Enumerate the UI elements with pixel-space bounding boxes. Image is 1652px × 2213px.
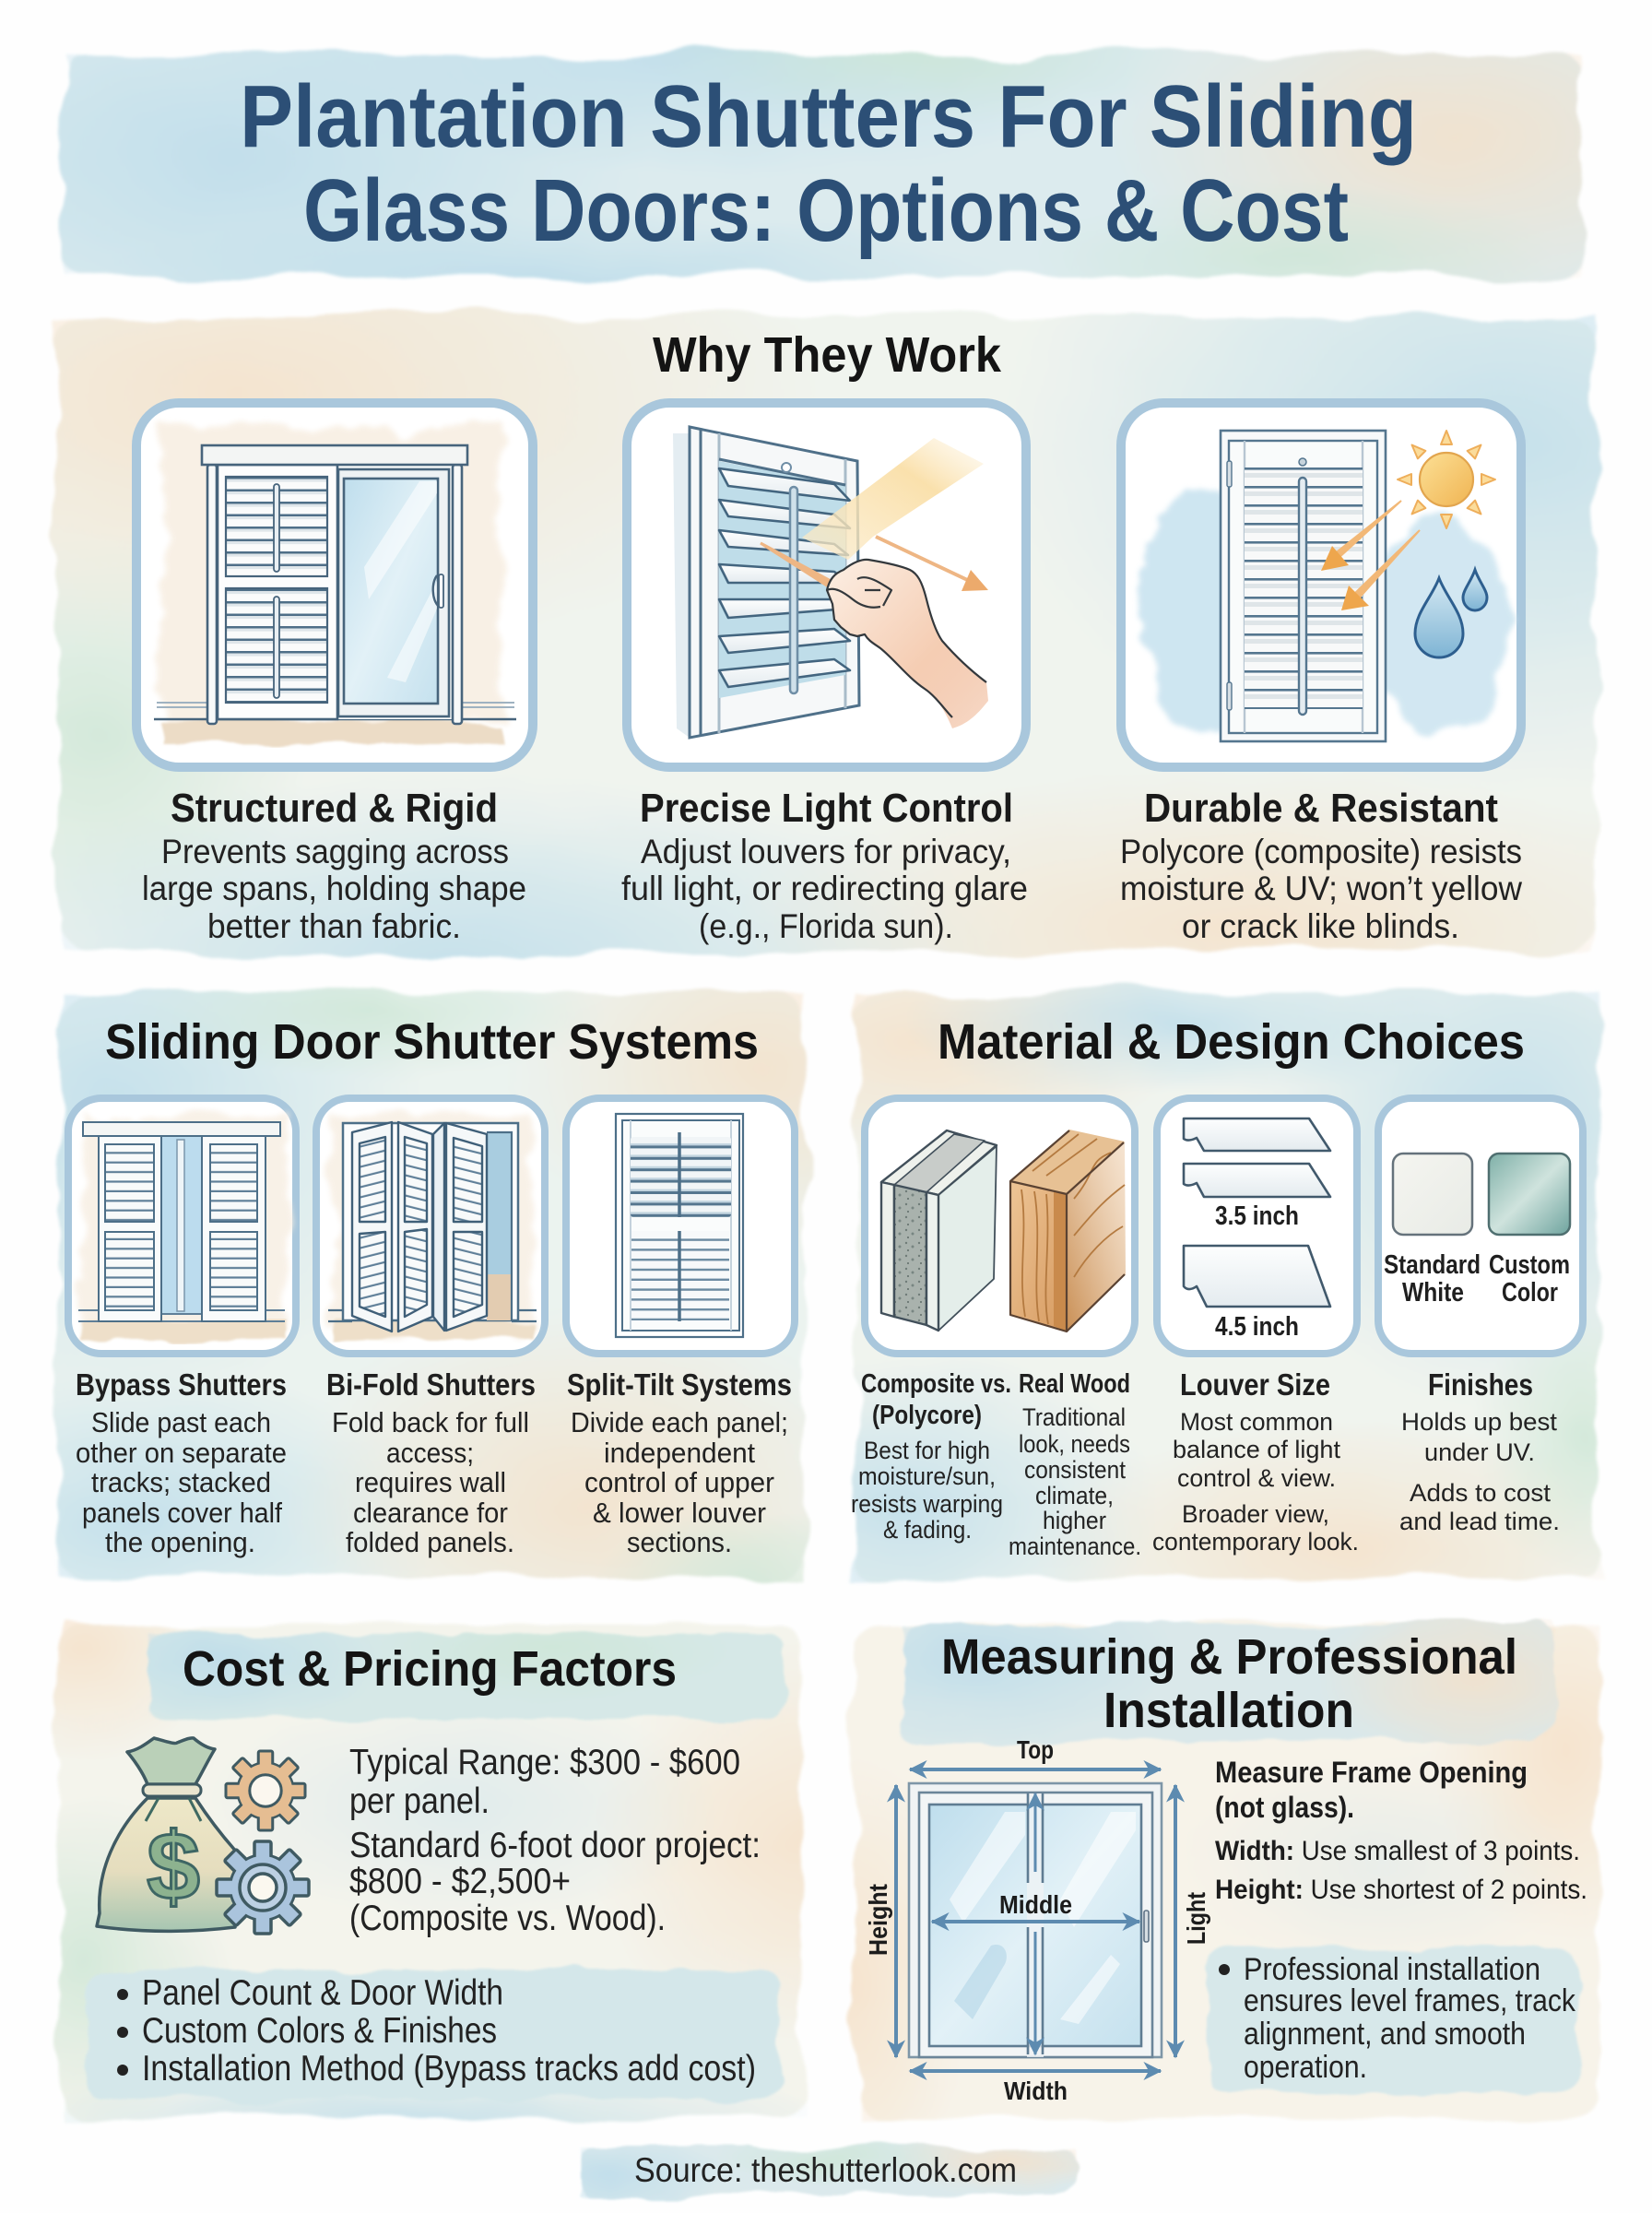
caption: structured and rigid [142,786,526,945]
caption: precise light control: (e.g., Florida sun). [699,907,953,945]
caption: bi-fold shutters: folded panels. [346,1526,514,1558]
caption: bi-fold shutters: Bi-Fold Shutters [326,1367,536,1402]
caption: finishes: and lead time. [1399,1508,1560,1535]
caption: split-tilt systems: control of upper [584,1466,774,1498]
caption: louver size: control & view. [1177,1464,1336,1492]
caption: durable and resistant: Polycore (composite) resists [1120,833,1522,870]
card: split-tilt illustration [566,1098,795,1354]
text: price ranges [349,1743,761,1938]
caption: real wood: consistent [1024,1456,1126,1484]
caption: finishes: Adds to cost [1410,1479,1551,1507]
heading wash: measuring [774,1577,1632,1770]
panel: cost and pricing factors [0,1540,1014,2176]
caption: bypass shutters: Slide past each [91,1406,271,1438]
caption: real wood: Real Wood [1019,1369,1130,1399]
title text [240,67,1417,260]
card: louver size illustration [1157,1098,1357,1354]
title text: Plantation Shutters For Sliding [240,67,1417,166]
caption: durable and resistant: moisture & UV; won’t yellow [1120,870,1522,907]
caption: structured and rigid: better than fabric. [207,907,461,945]
caption: split-tilt systems [567,1367,792,1558]
diagram: window measurement [864,1735,1210,2105]
caption: louver size: balance of light [1173,1436,1340,1463]
caption: real wood: look, needs [1019,1430,1130,1458]
text: measuring instructions: (not glass). [1215,1791,1354,1824]
card: light control illustration [627,403,1026,767]
caption: split-tilt systems: Split-Tilt Systems [567,1367,792,1402]
callout: professional installation: operation. [1244,2050,1367,2085]
diagram: window measurement: Middle [999,1890,1072,1919]
text: measuring instructions [1215,1756,1587,1905]
caption: louver size [1152,1367,1359,1556]
source badge [489,2121,1125,2213]
heading: measuring and professional installation: Measuring & Professional [941,1629,1517,1685]
callout: cost factors list [87,1970,780,2099]
caption: structured and rigid: large spans, holding shape [142,870,526,907]
caption: precise light control: Adjust louvers for privacy, [641,833,1011,870]
caption: louver size: Louver Size [1180,1367,1330,1402]
text: measuring instructions: Height: Use shortest of 2 points. [1215,1875,1587,1905]
caption: bi-fold shutters: access; [386,1437,474,1469]
heading: sliding door shutter systems: Sliding Door Shutter Systems [105,1014,759,1070]
card: structured and rigid illustration [136,403,533,767]
caption: precise light control: full light, or redirecting glare [621,870,1028,907]
callout: professional installation: ensures level frames, track [1244,1983,1576,2018]
text: price ranges: $800 - $2,500+ [349,1862,571,1901]
heading: material and design choices: Material & Design Choices [938,1014,1525,1070]
caption: split-tilt systems: Divide each panel; [571,1406,788,1438]
icon: money bag and gears: $ [147,1814,200,1921]
heading: cost and pricing factors: Cost & Pricing Factors [183,1641,677,1697]
source badge: Source: theshutterlook.com [634,2151,1017,2189]
caption: bi-fold shutters: clearance for [353,1497,508,1529]
label: finish names: Color [1502,1278,1558,1308]
caption: split-tilt systems: independent [604,1437,755,1469]
caption: bypass shutters: other on separate [76,1437,287,1469]
heading: measuring and professional installation [941,1629,1517,1738]
caption: finishes [1399,1367,1560,1535]
caption: structured and rigid: Structured & Rigid [171,786,498,831]
caption: bypass shutters: panels cover half [82,1497,282,1529]
panel: measuring and professional installation [747,1558,1652,2204]
card: finishes illustration [1378,1098,1583,1354]
label: finish names: White [1402,1278,1464,1308]
diagram: window measurement: Width [1004,2077,1068,2105]
card: bi-fold shutters illustration [316,1098,545,1354]
caption: composite vs polycore: & fading. [883,1516,972,1544]
callout: professional installation [1210,1946,1578,2093]
caption: real wood: maintenance. [1009,1533,1141,1560]
caption: real wood: climate, [1035,1482,1114,1509]
text: measuring instructions: Measure Frame Opening [1215,1756,1528,1789]
label: louver sizes [1215,1201,1299,1342]
card: durable and resistant illustration [1121,403,1521,767]
label: finish names [1384,1250,1570,1308]
caption: real wood: Traditional [1022,1403,1126,1431]
caption: bi-fold shutters [326,1367,536,1558]
label: finish names: Standard [1384,1250,1481,1280]
caption: durable and resistant [1120,786,1522,945]
title banner [0,0,1652,369]
heading: measuring and professional installation: Installation [1103,1683,1354,1738]
caption: structured and rigid: Prevents sagging across [161,833,509,870]
caption: composite vs polycore [851,1369,1011,1544]
caption: bypass shutters [76,1367,287,1558]
caption: durable and resistant: Durable & Resistant [1144,786,1498,831]
panel: material and design choices [636,839,1652,1678]
text: measuring instructions: Width: Use smallest of 3 points. [1215,1836,1580,1866]
caption: bi-fold shutters: requires wall [355,1466,506,1498]
diagram: window measurement: Light [1182,1892,1210,1945]
caption: louver size: contemporary look. [1152,1528,1359,1556]
label: louver sizes: 4.5 inch [1215,1312,1299,1342]
caption: bypass shutters: tracks; stacked [91,1466,271,1498]
callout: cost factors list: Installation Method (Bypass tracks add cost) [142,2049,756,2089]
panel: sliding door shutter systems [0,802,1023,1706]
caption: louver size: Broader view, [1182,1500,1329,1528]
caption: composite vs polycore: (Polycore) [872,1401,982,1430]
caption: split-tilt systems: sections. [627,1526,732,1558]
callout: professional installation: alignment, and smooth [1244,2017,1526,2052]
text: price ranges: Standard 6-foot door project: [349,1826,761,1865]
icon: water drops [1415,570,1487,657]
icon: money bag and gears [97,1738,309,1934]
caption: finishes: Holds up best [1401,1408,1557,1436]
text: price ranges: (Composite vs. Wood). [349,1899,666,1938]
caption: composite vs polycore: Composite vs. [861,1369,1011,1399]
caption: louver size: Most common [1180,1408,1333,1436]
card: composite vs wood illustration [865,1098,1135,1354]
label: finish names: Custom [1489,1250,1570,1280]
caption: precise light control [621,786,1028,945]
diagram: window measurement: Top [1017,1735,1054,1764]
caption: precise light control: Precise Light Control [640,786,1013,831]
text: price ranges: Typical Range: $300 - $600 [349,1743,740,1782]
icon: sun [1398,431,1495,528]
caption: composite vs polycore: Best for high [864,1437,990,1464]
caption: finishes: Finishes [1428,1367,1533,1402]
caption: real wood [1009,1369,1141,1560]
caption: bypass shutters: the opening. [105,1526,255,1558]
caption: finishes: under UV. [1424,1438,1535,1466]
callout: cost factors list: Custom Colors & Finishes [142,2011,497,2051]
caption: composite vs polycore: resists warping [851,1490,1003,1518]
caption: split-tilt systems: & lower louver [593,1497,766,1529]
caption: bi-fold shutters: Fold back for full [332,1406,529,1438]
title text: Glass Doors: Options & Cost [303,161,1349,260]
text: price ranges: per panel. [349,1781,490,1821]
diagram: window measurement: Height [864,1884,892,1956]
panel: why they work [0,92,1652,1143]
heading wash: cost and pricing factors [55,1595,784,1724]
callout: cost factors list: Panel Count & Door Width [142,1973,503,2013]
caption: real wood: higher [1043,1507,1106,1534]
heading: why they work: Why They Work [653,327,1002,383]
card: bypass shutters illustration [68,1098,296,1354]
callout: professional installation: Professional installation [1244,1952,1540,1987]
caption: composite vs polycore: moisture/sun, [858,1462,996,1490]
caption: durable and resistant: or crack like blinds. [1182,907,1459,945]
label: louver sizes: 3.5 inch [1215,1201,1299,1231]
caption: bypass shutters: Bypass Shutters [76,1367,287,1402]
